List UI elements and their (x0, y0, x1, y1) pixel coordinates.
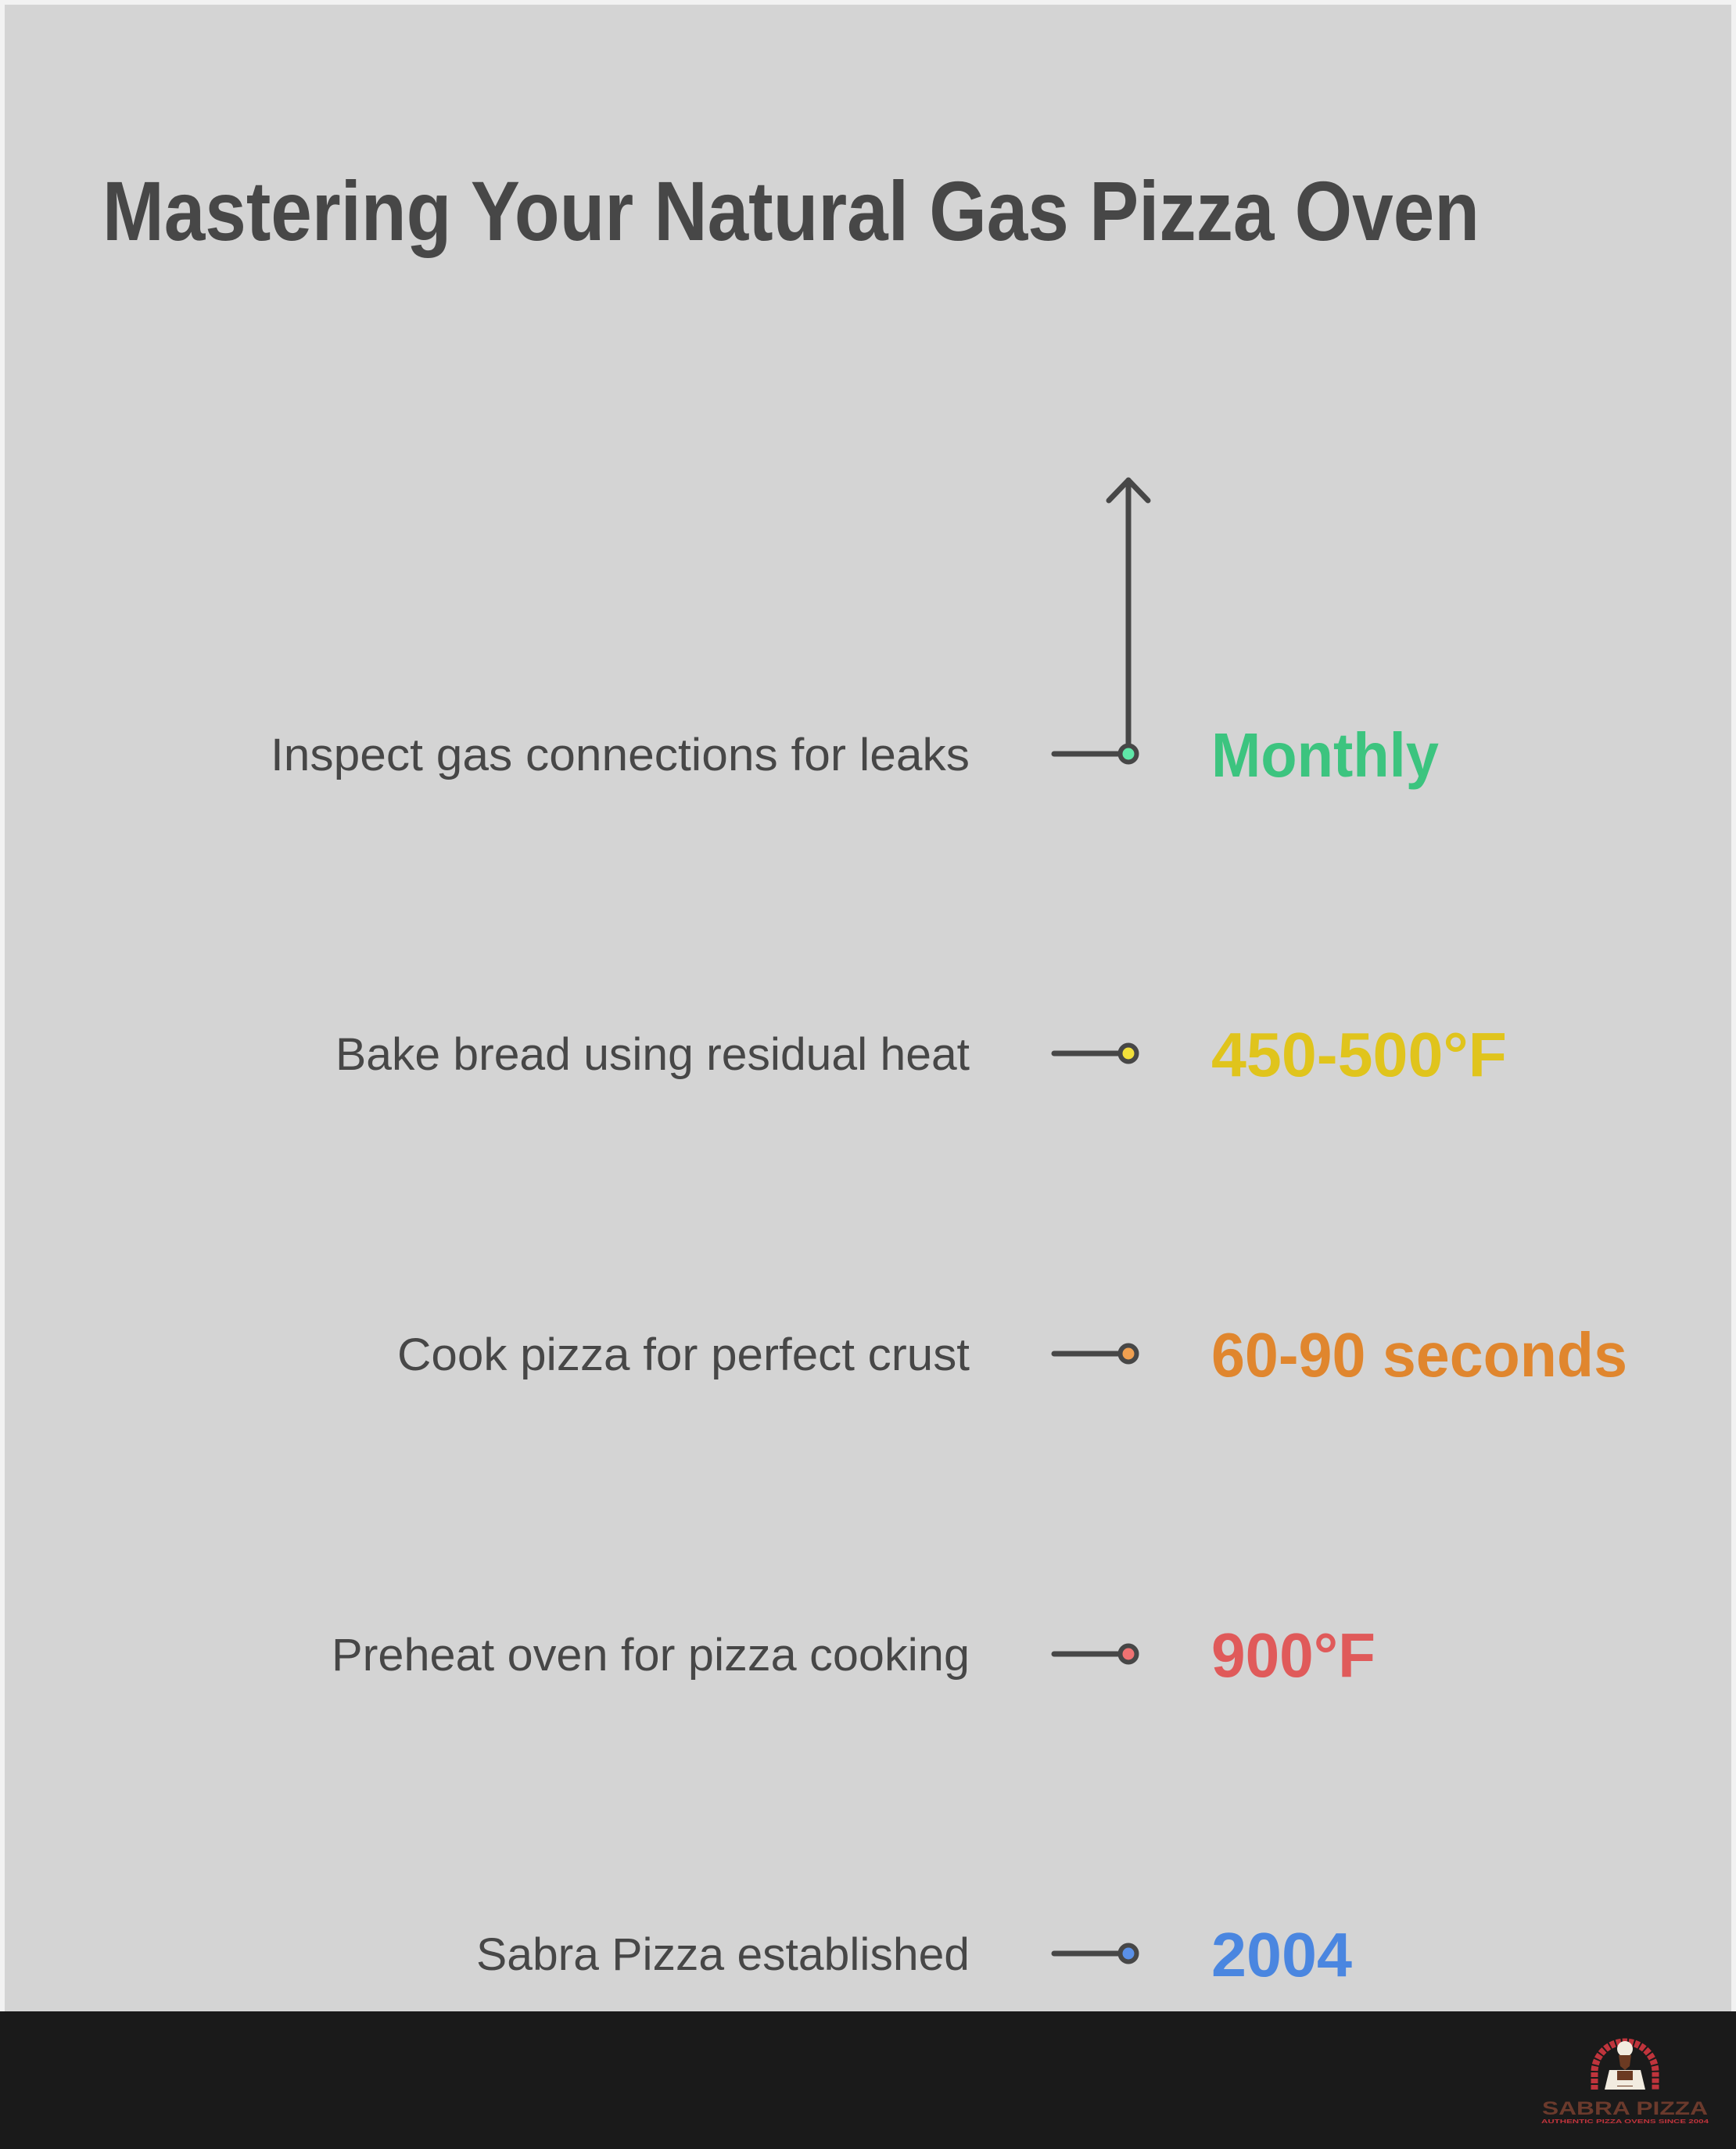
logo: Sabra Pizza (1541, 2041, 1709, 2125)
row: 2004: 2004 (1211, 1920, 1353, 1989)
row: 2004 (476, 1920, 1353, 1989)
row: Monthly: Monthly (1211, 720, 1439, 790)
row: 900°F: 900°F (1211, 1620, 1376, 1690)
row: 60-90 seconds (397, 1320, 1627, 1390)
row: 900°F (332, 1620, 1376, 1690)
row: 900°F: Preheat oven for pizza cooking (332, 1630, 970, 1681)
row: 450-500°F (335, 1020, 1507, 1089)
arrow: vertical timeline (1109, 480, 1148, 754)
row: 450-500°F: 450-500°F (1211, 1020, 1507, 1089)
logo: Sabra Pizza: SABRA PIZZA (1542, 2098, 1708, 2119)
row: Monthly: Inspect gas connections for leaks (271, 730, 970, 780)
footer bar (0, 2011, 1736, 2149)
row: Monthly (271, 720, 1439, 790)
row: 2004: Sabra Pizza established (476, 1929, 970, 1980)
row: 450-500°F: Bake bread using residual heat (335, 1029, 970, 1080)
row: 60-90 seconds: Cook pizza for perfect crust (397, 1329, 970, 1380)
title: Mastering Your Natural Gas Pizza Oven (102, 163, 1480, 258)
logo: Sabra Pizza: AUTHENTIC PIZZA OVENS SINCE 2004 (1541, 2119, 1709, 2125)
row: 60-90 seconds: 60-90 seconds (1211, 1320, 1627, 1390)
